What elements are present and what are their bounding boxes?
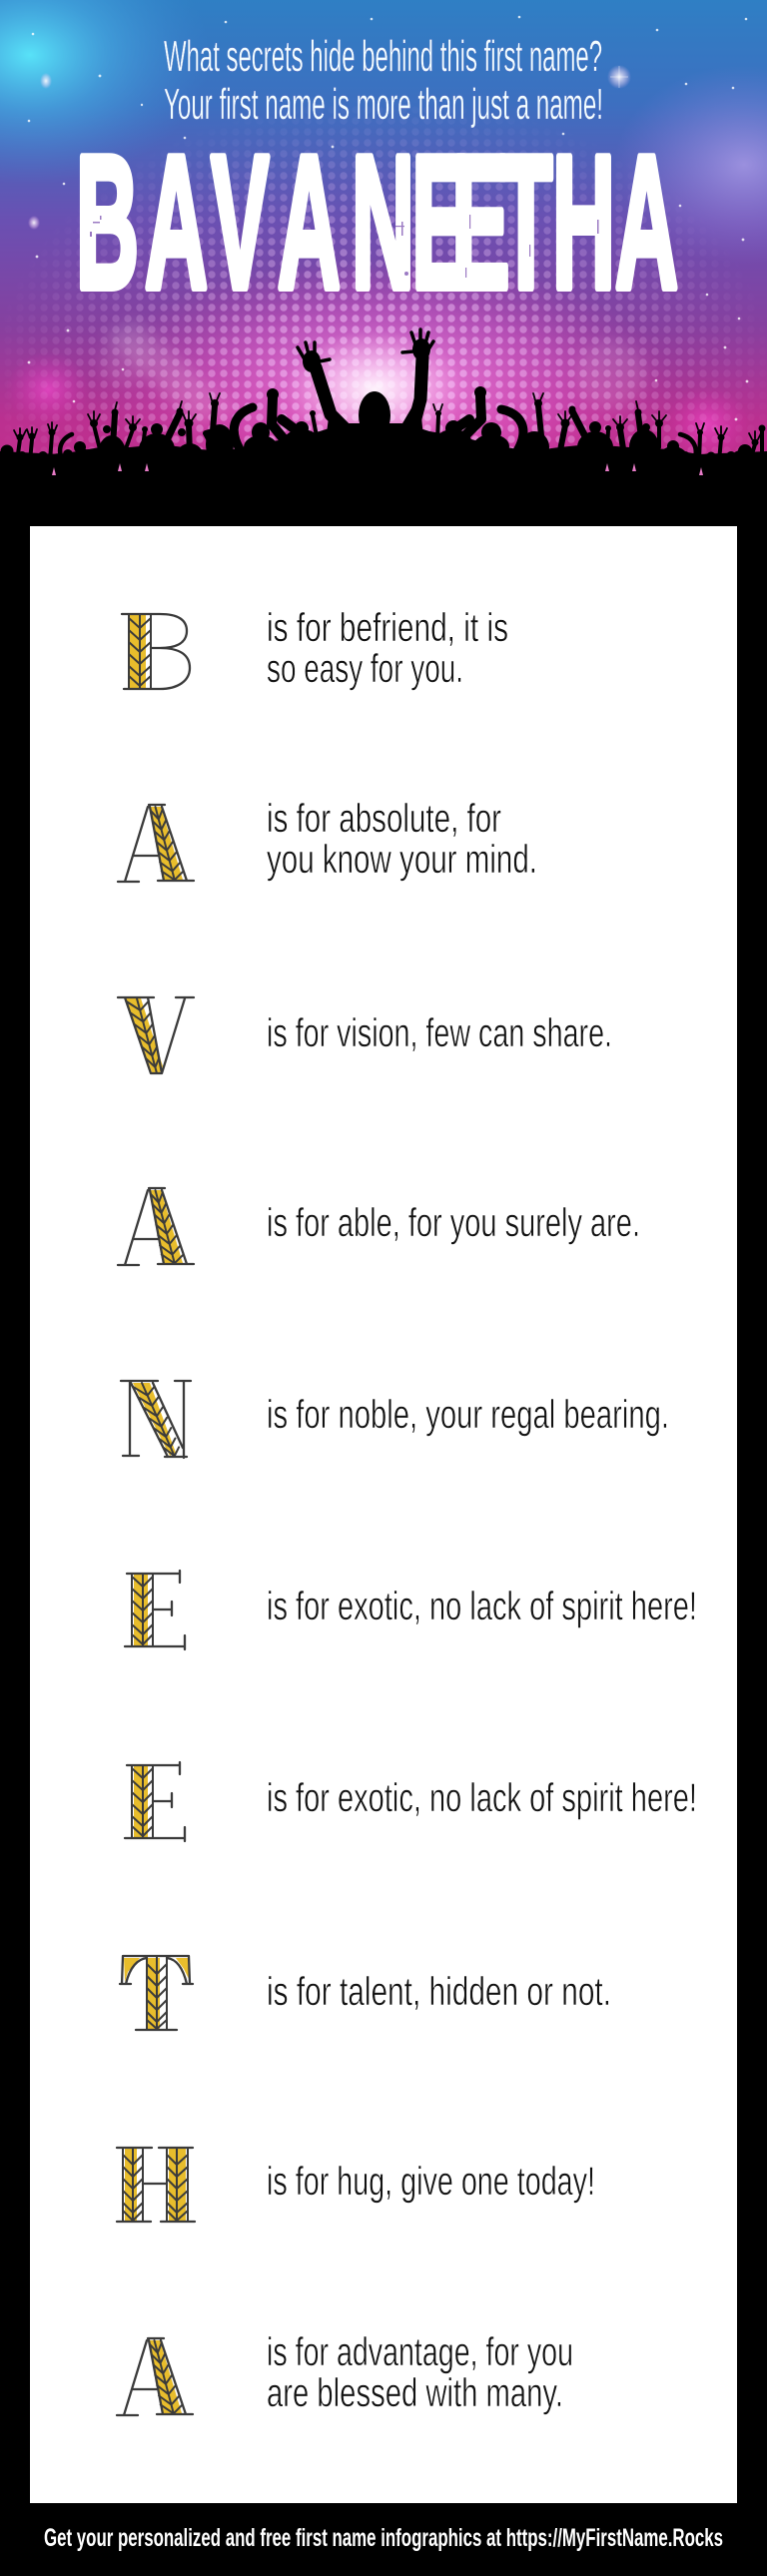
text: A line	[267, 797, 537, 882]
text: A line	[267, 2330, 573, 2415]
icon: wheat letter V	[118, 997, 194, 1073]
stars and sparkles	[28, 16, 748, 420]
icon: wheat letter H	[117, 2148, 195, 2222]
row: E (second)	[125, 1762, 697, 1841]
icon: wheat letter T	[120, 1956, 193, 2030]
row: A (able)	[118, 1188, 640, 1265]
row: T	[120, 1956, 611, 2030]
text: T line: is for talent, hidden or not.	[267, 1970, 611, 2014]
text: H line: is for hug, give one today!	[267, 2160, 595, 2204]
heading: tagline	[164, 32, 603, 129]
crowd base	[0, 423, 767, 526]
crowd heads	[0, 391, 752, 461]
row: E	[125, 1571, 697, 1649]
panel: hero stage background	[0, 0, 767, 454]
text: B line: so easy for you.	[267, 647, 463, 691]
row: V	[118, 997, 612, 1073]
light gaps in crowd	[52, 463, 703, 475]
fingers	[14, 329, 761, 439]
title: name: BAVANEETHA	[76, 117, 678, 328]
crowd torsos	[4, 394, 763, 489]
text: A line: is for absolute, for	[267, 797, 501, 841]
icon: wheat letter E	[125, 1571, 185, 1649]
panel: white letter list	[30, 526, 737, 2503]
icon: wheat letter A	[118, 805, 194, 882]
row: A (advantage)	[117, 2330, 573, 2415]
icon: wheat letter N	[121, 1381, 191, 1458]
icon: wheat letter E	[125, 1762, 185, 1841]
text: A line: you know your mind.	[267, 838, 537, 882]
raised arms	[17, 357, 762, 465]
text: V line: is for vision, few can share.	[267, 1011, 612, 1055]
distressed specks on title	[90, 215, 599, 278]
row: A (absolute)	[118, 797, 537, 882]
text: B line: is for befriend, it is	[267, 606, 508, 650]
text: A line: is for advantage, for you	[267, 2330, 573, 2374]
row: N	[121, 1381, 669, 1458]
illustration: crowd silhouette	[0, 329, 767, 526]
row: B	[122, 606, 508, 691]
icon: wheat letter A	[117, 2338, 193, 2415]
text: A line: is for able, for you surely are.	[267, 1201, 640, 1245]
text: B line	[267, 606, 508, 691]
icon: wheat letter B	[122, 614, 190, 689]
row: H	[117, 2148, 595, 2222]
raised hands	[16, 338, 765, 445]
icon: wheat letter A	[118, 1188, 194, 1265]
text: A line: are blessed with many.	[267, 2371, 563, 2415]
